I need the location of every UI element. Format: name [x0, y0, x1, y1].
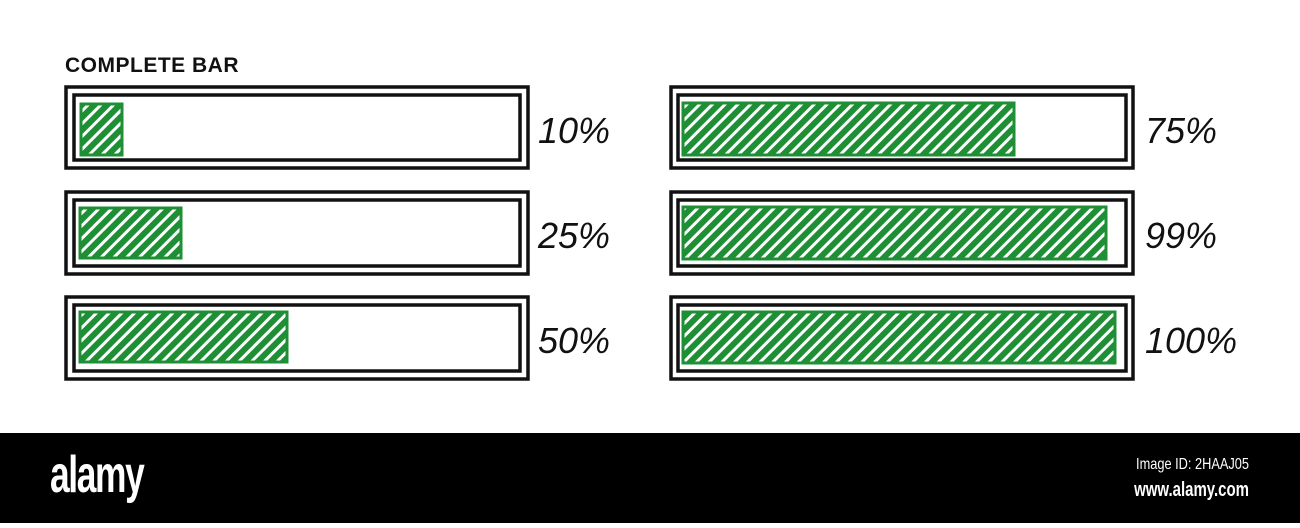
- logo: alamy: [50, 446, 145, 504]
- label 100%: 100%: [1145, 320, 1237, 361]
- bar 100%: [671, 297, 1133, 379]
- bar 25%: [66, 192, 528, 274]
- bar 75%: [671, 87, 1133, 168]
- label 75%: 75%: [1145, 110, 1217, 151]
- title: COMPLETE BAR: [65, 54, 239, 77]
- bar 99%: [671, 192, 1133, 274]
- label 99%: 99%: [1145, 215, 1217, 256]
- image id: Image ID: 2HAAJ05: [1136, 456, 1249, 473]
- label 50%: 50%: [538, 320, 610, 361]
- label 25%: 25%: [537, 215, 610, 256]
- bar 50%: [66, 297, 528, 379]
- bar 10%: [66, 87, 528, 168]
- url: www.alamy.com: [1133, 478, 1249, 501]
- footer band: [0, 433, 1300, 523]
- label 10%: 10%: [538, 110, 610, 151]
